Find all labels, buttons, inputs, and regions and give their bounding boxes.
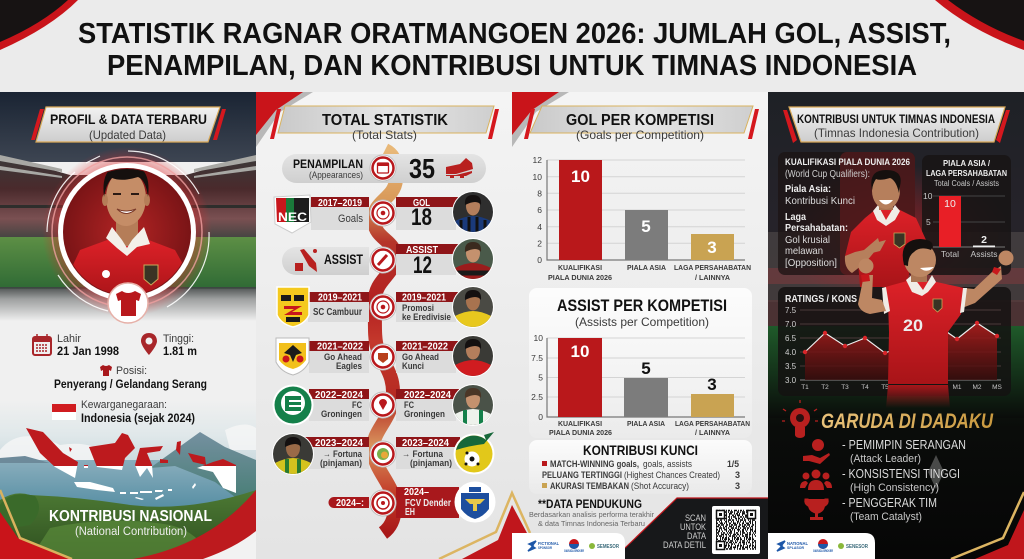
photo: celebrating player (number 20): 20 xyxy=(903,316,923,335)
photo: player xyxy=(452,384,494,426)
row: 2021-2022: Eagles xyxy=(336,361,362,372)
line chart: T3 xyxy=(841,384,849,391)
row: 2023-2024: 2023–2024 xyxy=(315,438,363,449)
info: height: 1.81 m xyxy=(163,344,197,358)
photo: player xyxy=(452,335,494,377)
row: 2019-2021: Promosi xyxy=(402,303,434,314)
line chart: MS xyxy=(992,384,1003,391)
logo: NEC xyxy=(274,195,311,233)
supporting data note: Berdasarkan analisis performa terakhir xyxy=(529,510,654,519)
icon: assist xyxy=(295,249,317,272)
bar chart: goals: PIALA DUNIA 2026 xyxy=(548,273,612,282)
scan panel: UNTOK xyxy=(680,522,707,533)
bar chart: assists: 2.5 xyxy=(531,392,543,402)
bar chart: goals: PIALA ASIA xyxy=(627,263,667,272)
row: 2019-2021: 2019–2021 xyxy=(402,292,446,304)
row: 2024: EH xyxy=(405,507,415,518)
row: goals 2017-2019: Goals xyxy=(338,213,363,225)
corner: left xyxy=(0,0,78,50)
row: 2023-2024: (pinjaman) xyxy=(320,458,362,469)
list: team catalyst: (Team Catalyst) xyxy=(850,511,922,523)
row: 2023-2024: → Fortuna xyxy=(323,449,363,460)
icon: fortuna badge xyxy=(370,441,396,467)
title xyxy=(78,18,951,82)
icon: bulb xyxy=(782,400,818,438)
icon: hand with coin xyxy=(803,439,830,464)
icon: club badge xyxy=(370,490,396,516)
banner: gol xyxy=(524,106,759,142)
bar chart: goals xyxy=(533,155,751,282)
scan panel: SCAN xyxy=(685,513,706,524)
card: assist per kompetisi: (Assists per Competition) xyxy=(575,315,709,329)
row: goals 2017-2019 xyxy=(274,191,494,233)
row: penampilan: (Appearances) xyxy=(309,170,363,181)
stadium background xyxy=(768,165,1024,418)
card: piala asia chart xyxy=(922,155,1011,275)
logo: FC Groningen xyxy=(272,384,314,426)
icon: people xyxy=(800,470,832,490)
row: 2023-2024: 2023–2024 xyxy=(402,438,449,449)
bar chart: assists: 5 xyxy=(641,359,651,378)
card: qualifiers: Gol krusial xyxy=(785,234,830,246)
icon: trophy xyxy=(805,499,828,520)
card: kontribusi kunci: KONTRIBUSI KUNCI xyxy=(583,442,698,458)
panel: profil xyxy=(0,92,256,559)
card: piala asia chart: LAGA PERSAHABATAN xyxy=(926,168,1007,178)
supporting data note: **DATA PENDUKUNG xyxy=(538,497,642,511)
banner: kontribusi: (Timnas Indonesia Contribution) xyxy=(814,126,979,140)
row: 2024 xyxy=(329,482,496,522)
panel: kontribusi timnas xyxy=(768,92,1024,559)
line chart: M1 xyxy=(952,384,962,391)
icon: flag xyxy=(52,404,76,420)
card: qualifiers: (World Cup Qualifiers): xyxy=(785,169,870,180)
icon: pin badge xyxy=(370,392,396,418)
sponsors card: SEMESOR xyxy=(597,544,619,550)
bar chart: goals: 3 xyxy=(707,238,717,257)
row: 2021-2022 xyxy=(276,335,494,377)
row: 2021-2022: Go Ahead xyxy=(402,352,439,363)
bar chart: goals: / LAINNYA xyxy=(695,273,731,282)
list: high consistency xyxy=(800,467,960,494)
sponsors card: GARUDA BROKER xyxy=(813,549,833,553)
row: 2022-2024: 2022–2024 xyxy=(404,390,451,401)
line chart: T1 xyxy=(801,384,809,391)
card: assist per kompetisi: ASSIST PER KOMPETISI xyxy=(557,296,727,315)
sponsors card xyxy=(768,533,875,559)
ribbon timeline xyxy=(373,150,397,533)
bar chart: assists: / LAINNYA xyxy=(695,428,731,437)
row: 2024: 2024– xyxy=(404,487,429,498)
card: qualifiers: Laga xyxy=(785,211,806,223)
map of Indonesia xyxy=(26,428,236,500)
line chart: 4.0 xyxy=(785,348,797,357)
info: birth date: Lahir xyxy=(57,333,81,345)
row: 2022-2024: Groningen xyxy=(404,409,445,420)
scan panel: DATA xyxy=(687,531,707,542)
row: 2022-2024: FC xyxy=(404,400,414,411)
portrait xyxy=(42,147,212,323)
card: kontribusi kunci xyxy=(529,440,752,494)
line chart xyxy=(785,306,1003,391)
info: birth date: 21 Jan 1998 xyxy=(57,344,119,358)
row: assist xyxy=(282,238,494,280)
national contribution heading: KONTRIBUSI NASIONAL xyxy=(49,508,212,525)
card: qualifiers: melawan xyxy=(785,245,823,257)
line chart: 7.5 xyxy=(785,306,797,315)
photo: player xyxy=(272,433,314,475)
card: kontribusi kunci: MATCH-WINNING goals, xyxy=(550,459,639,469)
bar chart: assists: 7.5 xyxy=(531,353,543,363)
card: piala asia chart: PIALA ASIA / xyxy=(943,158,991,168)
card: piala asia chart: Assists xyxy=(971,249,997,259)
row: 2021-2022: 2021–2022 xyxy=(402,342,448,352)
QR code xyxy=(712,506,760,554)
banner: total statistik xyxy=(270,106,499,142)
bar chart: goals: LAGA PERSAHABATAN xyxy=(674,263,751,272)
banner: total statistik: TOTAL STATISTIK xyxy=(322,112,448,129)
banner: profil: (Updated Data) xyxy=(89,128,166,142)
photo: celebrating player (number 20) xyxy=(858,239,1014,408)
bar chart: assists: PIALA DUNIA 2026 xyxy=(549,428,612,437)
logo: Go Ahead Eagles xyxy=(276,338,309,375)
sponsors card xyxy=(512,533,625,559)
sponsors card: NATIONAL xyxy=(787,541,808,546)
list: team catalyst: - PENGGERAK TIM xyxy=(842,496,937,510)
icon: boot xyxy=(446,158,473,178)
card: assist per kompetisi xyxy=(529,288,752,438)
bar chart: assists: PIALA ASIA xyxy=(627,419,666,428)
corner: right xyxy=(935,0,1024,50)
bar chart: goals: 0 xyxy=(537,255,542,265)
list: high consistency: (High Consistency) xyxy=(850,482,939,494)
row: 2024: 2024–: xyxy=(336,498,364,509)
bar chart: goals: KUALIFIKASI xyxy=(558,263,602,272)
card: kontribusi kunci: goals, assists xyxy=(643,459,692,469)
info: nationality: Indonesia (sejak 2024) xyxy=(81,411,195,425)
icon: club badge xyxy=(370,344,396,370)
bar chart: goals: 5 xyxy=(641,217,651,236)
sponsors card: GARUDA BROKER xyxy=(564,549,584,553)
bar chart: goals: 12 xyxy=(533,155,542,165)
stadium background xyxy=(0,92,256,327)
row: 2019-2021: ke Eredivisie xyxy=(402,312,451,323)
bar chart: goals: 6 xyxy=(537,205,542,215)
line chart: 6.5 xyxy=(785,334,797,343)
row: penampilan xyxy=(282,153,486,184)
line chart: T2 xyxy=(821,384,829,391)
info: nationality xyxy=(52,399,195,425)
info: birth date xyxy=(33,333,119,358)
sponsors card: FICTIONAL xyxy=(538,541,559,546)
card: qualifiers: KUALIFIKASI PIALA DUNIA 2026 xyxy=(785,157,910,168)
list: attack leader: - PEMIMPIN SERANGAN xyxy=(842,438,966,452)
line chart: T4 xyxy=(861,384,869,391)
row: 2021-2022: Kunci xyxy=(402,361,424,372)
row: 2024: FCV Dender xyxy=(405,498,451,509)
card: qualifiers xyxy=(778,152,915,275)
card: ratings xyxy=(778,287,1011,396)
sponsors card: SPLASOR xyxy=(787,545,804,550)
row: goals 2017-2019: GOL xyxy=(413,198,430,209)
national contribution heading xyxy=(49,508,212,538)
bar chart: assists: 10 xyxy=(534,333,543,343)
info: height xyxy=(141,333,197,358)
sparkle xyxy=(928,455,944,489)
bar chart: assists: 10 xyxy=(571,342,589,361)
photo: celebrating player (pointing) xyxy=(845,170,926,287)
row: 2023-2024: (pinjaman) xyxy=(410,458,452,469)
bar chart: assists: LAGA PERSAHABATAN xyxy=(675,419,750,428)
center star ornament xyxy=(439,493,530,559)
icon: boot badge xyxy=(370,247,396,273)
row: 2021-2022: Go Ahead xyxy=(324,352,362,363)
bar chart: assists: 0 xyxy=(538,412,543,422)
bar chart: assists xyxy=(531,333,750,437)
bar chart: goals: 10 xyxy=(533,172,542,182)
list: attack leader: (Attack Leader) xyxy=(850,453,921,465)
card: qualifiers: Kontribusi Kunci xyxy=(785,195,855,207)
row: goals 2017-2019: 18 xyxy=(411,204,432,231)
bar chart: goals: 4 xyxy=(537,222,542,232)
bar chart: assists: 5 xyxy=(538,372,543,382)
logo: FCV Dender xyxy=(454,482,496,522)
sponsors card: SPONSOR xyxy=(538,545,552,550)
row: assist: ASSIST xyxy=(324,251,363,267)
line chart: M2 xyxy=(972,384,982,391)
banner: gol: GOL PER KOMPETISI xyxy=(566,112,714,129)
row: 2022-2024: FC xyxy=(352,400,362,411)
bar chart: assists: KUALIFIKASI xyxy=(558,419,602,428)
row: penampilan: 35 xyxy=(409,153,435,184)
info: position xyxy=(54,365,207,391)
row: penampilan: PENAMPILAN xyxy=(293,157,363,171)
landscape xyxy=(0,400,256,559)
banner: gol: (Goals per Competition) xyxy=(576,128,704,142)
row: assist: 12 xyxy=(413,252,432,279)
banner: kontribusi xyxy=(783,107,1010,143)
card: kontribusi kunci: 1/5 xyxy=(727,459,739,469)
card: kontribusi kunci: (Shot Accuracy) xyxy=(631,481,689,491)
line chart: 3.5 xyxy=(785,362,797,371)
card: ratings: RATINGS / KONS xyxy=(785,293,857,305)
bar chart: goals: 8 xyxy=(537,188,542,198)
card: qualifiers: Persahabatan: xyxy=(785,222,848,234)
scan panel xyxy=(625,498,768,559)
banner: profil: PROFIL & DATA TERBARU xyxy=(50,111,207,127)
card: qualifiers: Piala Asia: xyxy=(785,183,831,195)
sponsors card: SENESOR xyxy=(846,544,868,550)
row: goals 2017-2019: 2017–2019 xyxy=(318,198,362,209)
list: high consistency: - KONSISTENSI TINGGI xyxy=(842,467,960,481)
card: piala asia chart: Total Coals / Assists xyxy=(934,179,999,188)
row: 2022-2024: 2022–2024 xyxy=(315,390,363,401)
line chart: T5 xyxy=(881,384,889,391)
icon: ball badge xyxy=(370,294,396,320)
icon: small shirt xyxy=(100,365,112,376)
corner ornament xyxy=(951,492,1024,559)
title: STATISTIK RAGNAR ORATMANGOEN 2026: JUMLAH GOL, ASSIST, xyxy=(78,18,951,50)
icon: calendar badge xyxy=(370,155,396,181)
supporting data note xyxy=(529,497,654,528)
card: piala asia chart: 10 xyxy=(944,198,956,210)
photo: player xyxy=(452,238,494,280)
logo: NEC: NEC xyxy=(278,210,307,224)
list: team catalyst xyxy=(805,496,937,523)
banner: kontribusi: KONTRIBUSI UNTUK TIMNAS INDONESIA xyxy=(797,114,995,126)
banner: profil xyxy=(31,107,226,142)
row: 2023-2024 xyxy=(272,432,494,475)
logo: Fortuna Sittard xyxy=(454,432,494,474)
card: qualifiers: [Opposition] xyxy=(785,257,837,269)
info: position: Posisi: xyxy=(116,365,147,377)
row: 2019-2021: 2019–2021 xyxy=(318,292,362,304)
row: 2019-2021: SC Cambuur xyxy=(313,307,362,318)
bar chart: assists: 3 xyxy=(707,375,717,394)
line chart: 3.0 xyxy=(785,376,797,385)
row: assist: ASSIST xyxy=(406,245,438,256)
national contribution heading: (National Contribution) xyxy=(75,526,187,538)
title: PENAMPILAN, DAN KONTRIBUSI UNTUK TIMNAS INDONESIA xyxy=(107,50,917,82)
panel: total statistik xyxy=(256,92,512,559)
info: nationality: Kewarganegaraan: xyxy=(81,399,167,411)
row: 2023-2024: → Fortuna xyxy=(402,449,444,460)
row: 2019-2021 xyxy=(277,286,494,328)
card: piala asia chart: Total xyxy=(941,249,959,259)
row: 2022-2024 xyxy=(272,384,494,426)
card: piala asia chart: 10 xyxy=(923,191,933,201)
card: kontribusi kunci: AKURASI TEMBAKAN xyxy=(550,481,629,491)
heading: garuda di dadaku xyxy=(782,400,994,438)
info: height: Tinggi: xyxy=(163,333,194,345)
photo: player xyxy=(452,286,494,328)
bar chart: goals: 2 xyxy=(537,238,542,248)
card: kontribusi kunci: 3 xyxy=(735,470,740,480)
icon: shirt badge xyxy=(108,283,148,323)
banner: total statistik: (Total Stats) xyxy=(352,128,417,142)
row: 2021-2022: 2021–2022 xyxy=(317,342,363,352)
supporting data note: & data Timnas Indonesia Terbaru xyxy=(538,519,645,528)
logo: SC Cambuur xyxy=(277,287,309,327)
icon: pin xyxy=(141,333,157,355)
row: 2022-2024: Groningen xyxy=(321,409,362,420)
photo: player xyxy=(452,191,494,233)
card: kontribusi kunci: 3 xyxy=(735,481,740,491)
icon: calendar xyxy=(33,334,51,355)
icon: ball badge xyxy=(370,200,396,226)
info: position: Penyerang / Gelandang Serang xyxy=(54,377,207,391)
card: kontribusi kunci: (Highest Chances Created) xyxy=(624,470,720,480)
scan panel: DATA DETIL xyxy=(663,540,706,551)
header xyxy=(0,0,1024,92)
list: attack leader xyxy=(803,438,966,465)
card: piala asia chart: 2 xyxy=(981,234,987,246)
card: piala asia chart: 5 xyxy=(926,217,931,227)
line chart: 7.0 xyxy=(785,320,797,329)
bar chart: goals: 10 xyxy=(571,167,590,186)
panel: gol per kompetisi xyxy=(439,92,768,559)
card: kontribusi kunci: PELUANG TERTINGGI xyxy=(542,470,622,480)
